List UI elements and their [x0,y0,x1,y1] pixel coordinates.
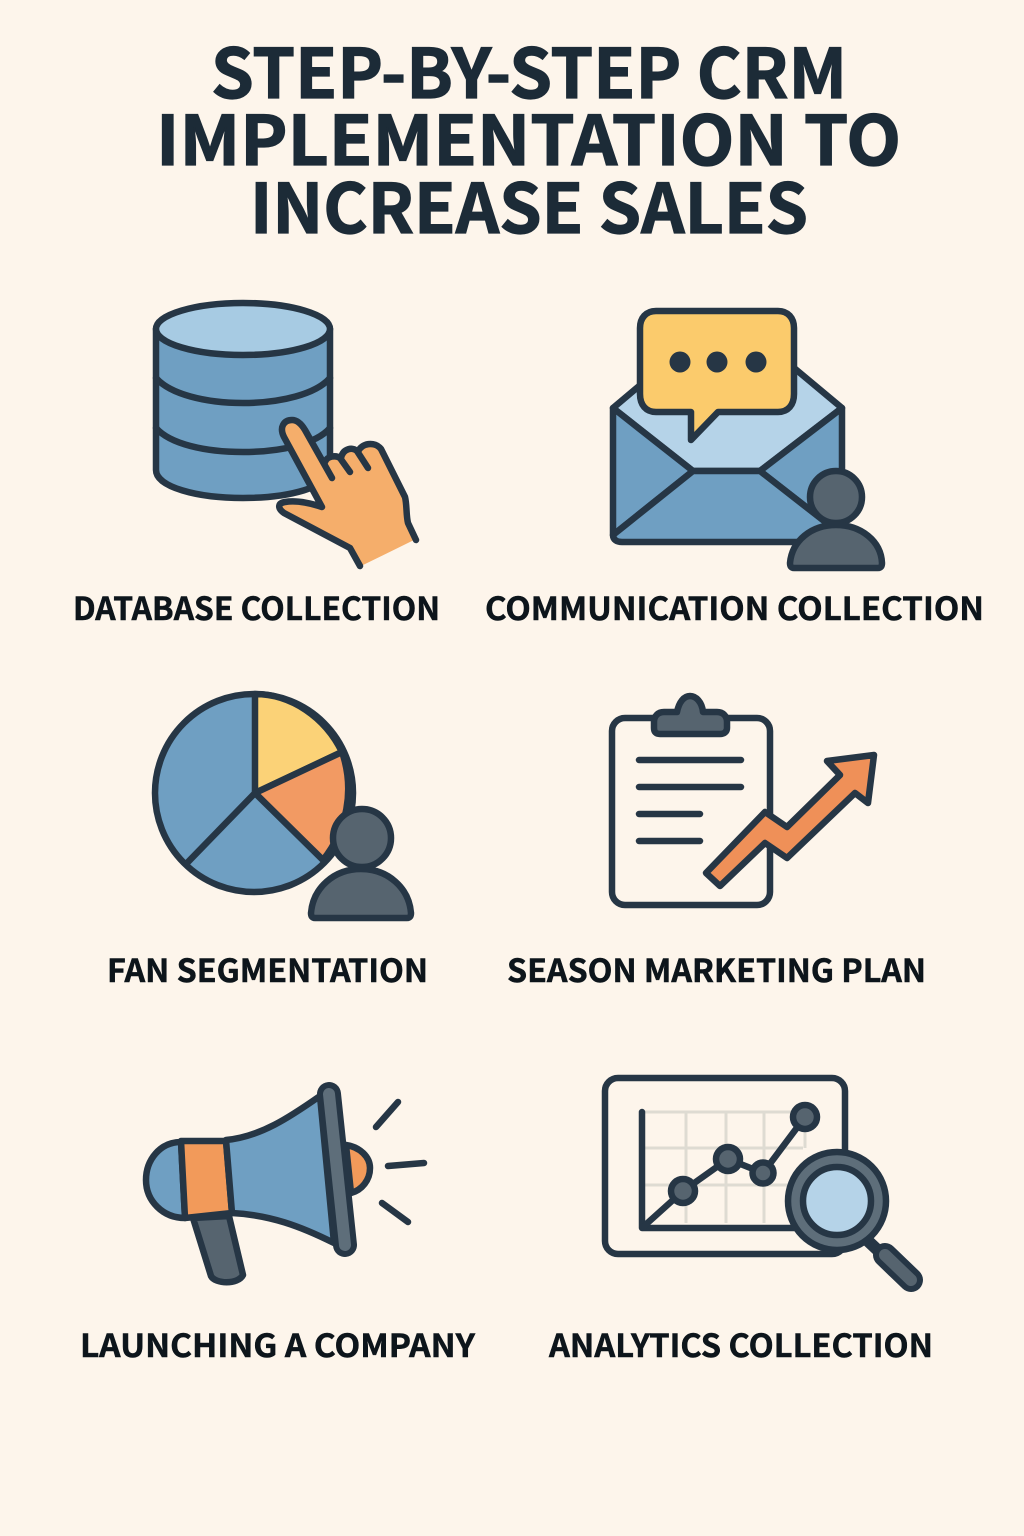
label: analytics collection: ANALYTICS COLLECTION [548,1321,933,1367]
label: fan segmentation: FAN SEGMENTATION [107,946,428,992]
label: database collection: DATABASE COLLECTION [73,584,440,630]
icon: person [311,809,411,918]
icon: pie chart with person [155,694,411,918]
icon: analytics chart with magnifier [605,1078,911,1280]
icon: magnifying glass [788,1152,911,1280]
icon: clipboard with rising arrow [612,696,874,905]
title: IMPLEMENTATION TO [156,86,901,185]
label: communication collection: COMMUNICATION COLLECTION [485,584,984,630]
label: season marketing plan: SEASON MARKETING PLAN [507,946,926,992]
label: launching a company: LAUNCHING A COMPANY [80,1321,476,1367]
icon: megaphone with sound rays [146,1094,424,1282]
title [156,19,901,253]
title: INCREASE SALES [250,154,808,253]
icon: envelope with chat bubble and person [613,311,882,568]
icon: database with pointing hand [156,303,416,566]
icon: person [790,471,882,568]
title: STEP-BY-STEP CRM [211,19,847,118]
